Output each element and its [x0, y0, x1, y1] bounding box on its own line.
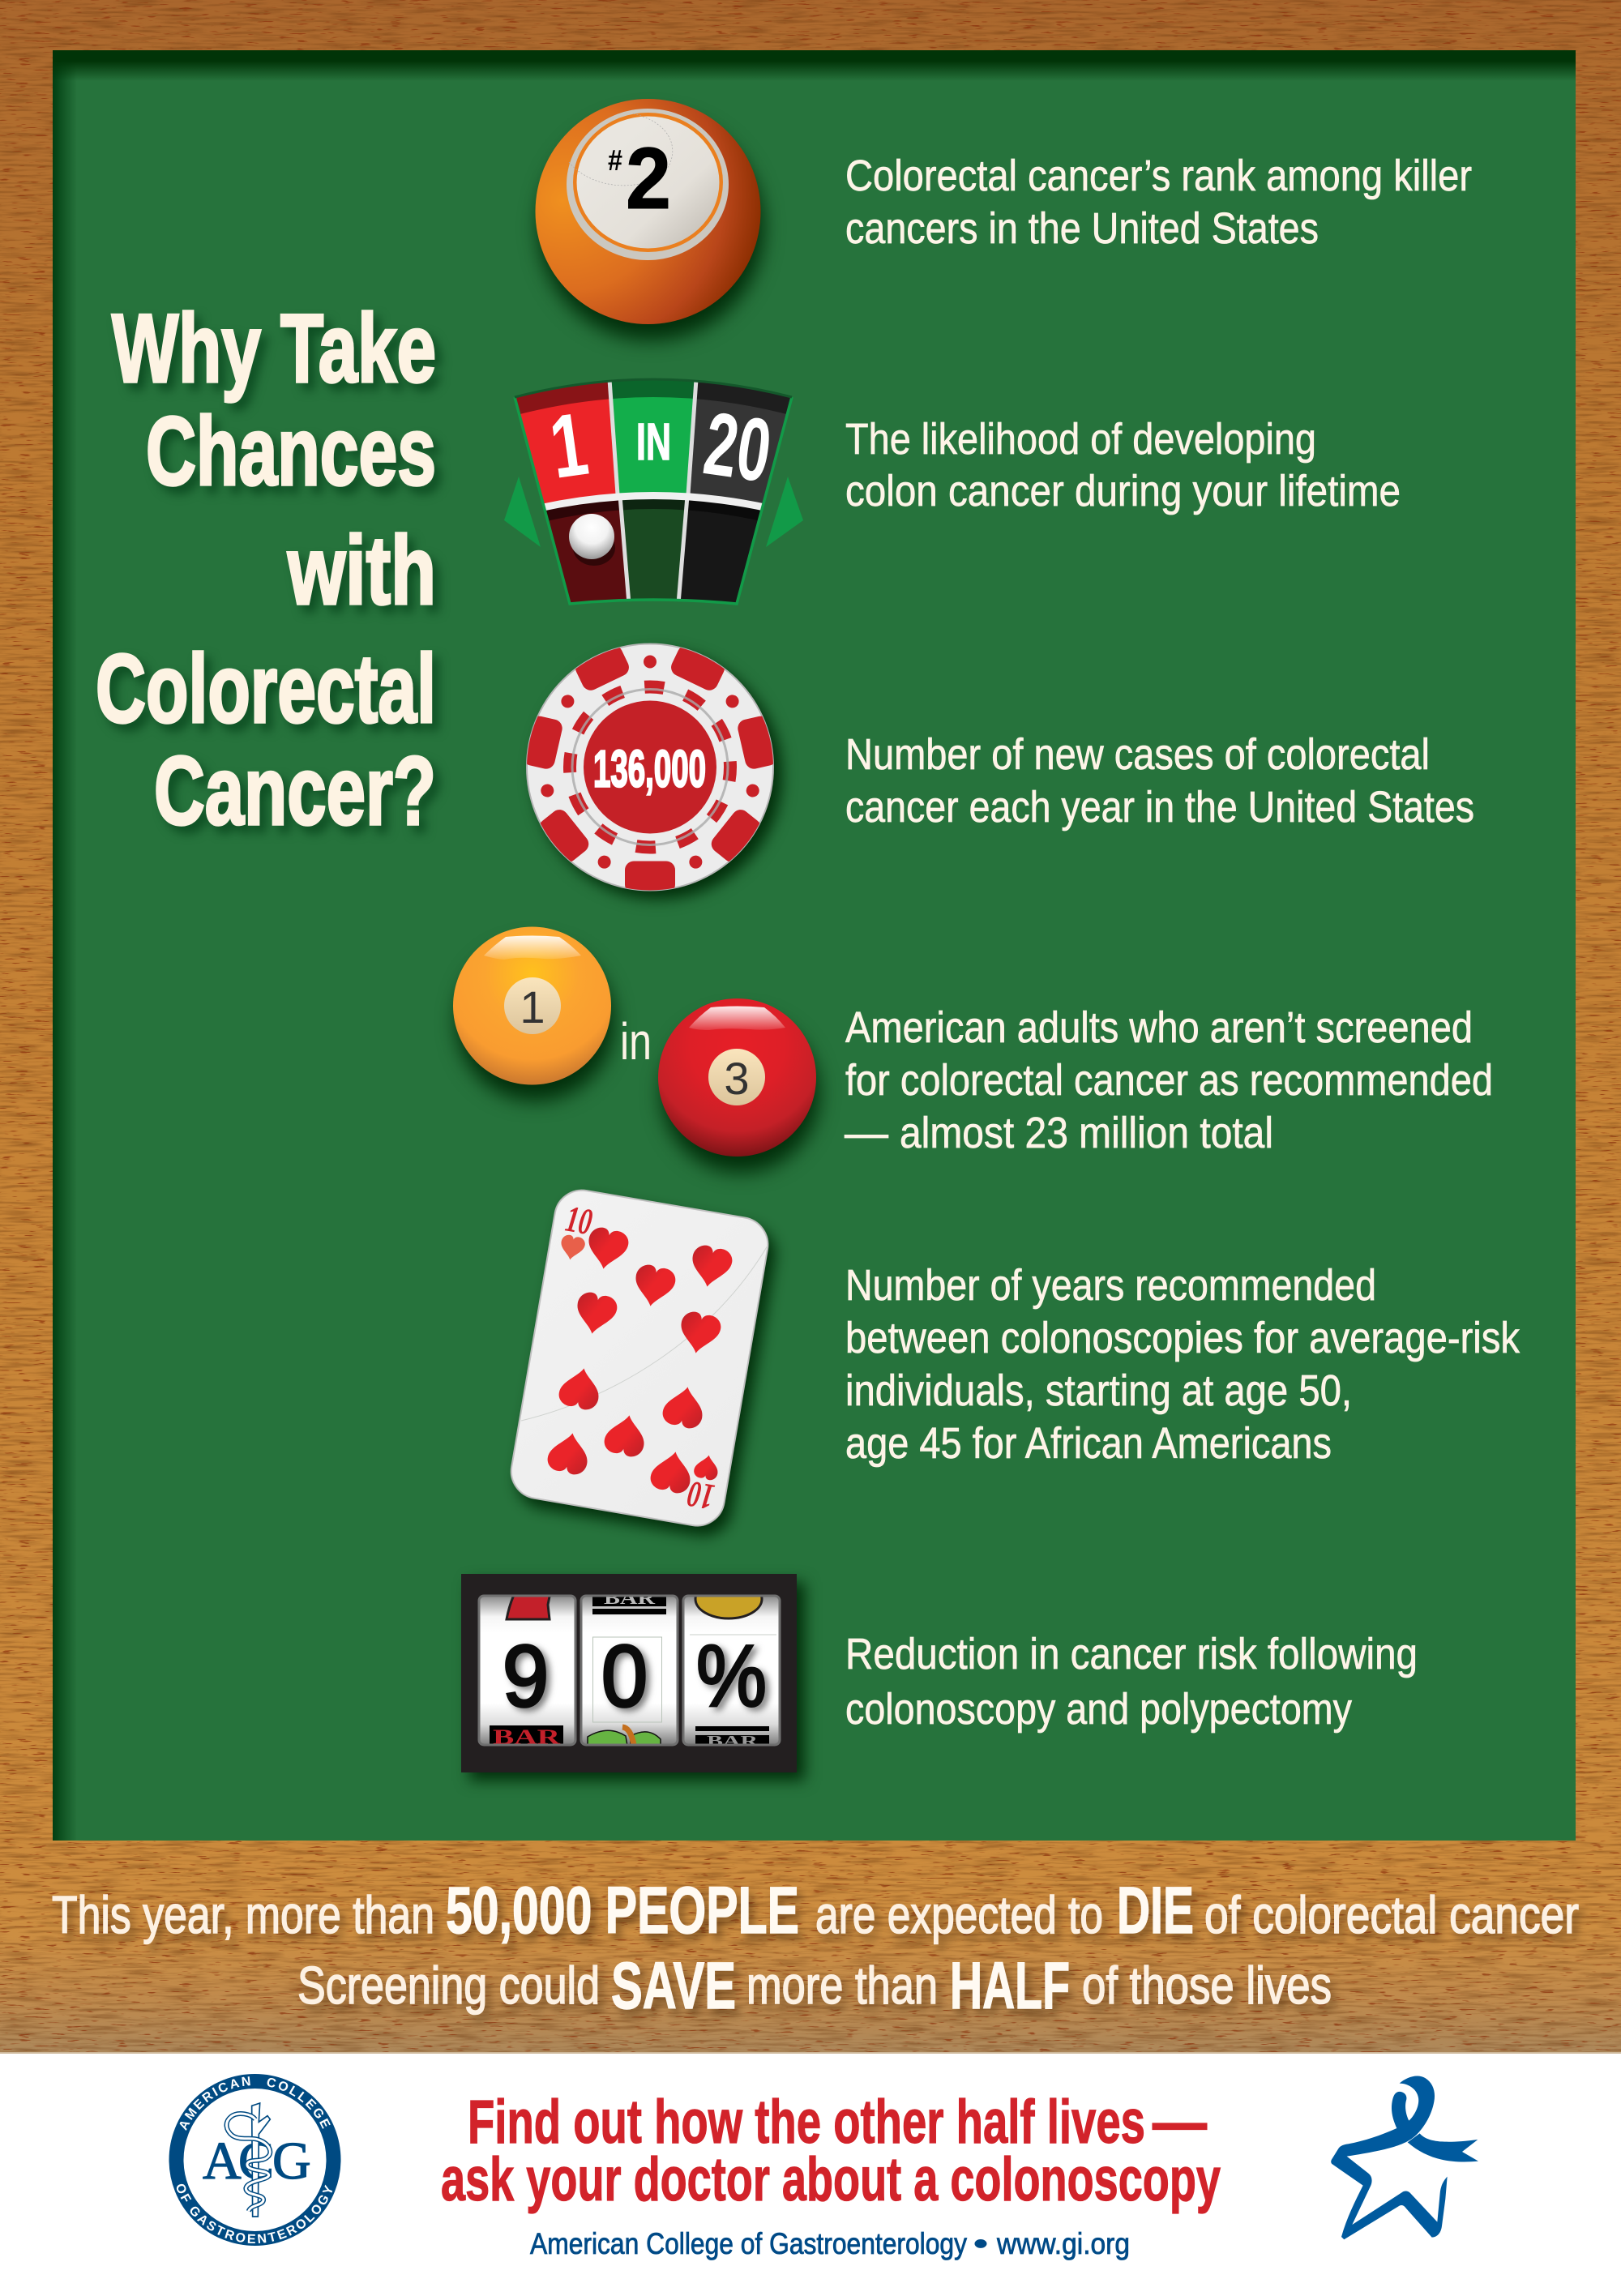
reel 9	[479, 1588, 575, 1750]
text: reduction in cancer risk: colonoscopy and polypectomy	[845, 1685, 1352, 1734]
text: adults not screened: for colorectal cancer as recommended	[845, 1056, 1493, 1105]
reel 9: 9	[503, 1627, 549, 1725]
logo: American College of Gastroenterology: OF GASTROENTEROLOGY	[177, 2183, 332, 2243]
banner text on wood: HALF	[950, 1949, 1070, 2023]
text: new cases each year: Number of new cases of colorectal	[845, 730, 1430, 779]
title: with	[287, 516, 436, 625]
banner text on wood: SAVE	[611, 1949, 736, 2023]
logo: American College of Gastroenterology: A	[203, 2131, 242, 2191]
banner text on wood: 50,000 PEOPLE	[446, 1874, 799, 1948]
logo: American College of Gastroenterology: C	[238, 2131, 274, 2191]
text: years between colonoscopies: individuals, starting at age 50,	[845, 1366, 1352, 1415]
text: lifetime likelihood	[845, 415, 1401, 515]
roulette sectors	[516, 381, 790, 603]
icon: ten of hearts playing card: 10	[685, 1473, 717, 1518]
icon: slot machine 90%	[461, 1574, 797, 1772]
text: rank among killer cancers	[845, 152, 1472, 253]
roulette ball	[569, 514, 615, 566]
reel percent: %	[696, 1627, 767, 1725]
text: rank among killer cancers: Colorectal cancer’s rank among killer	[845, 152, 1472, 200]
logo: ribbon star	[1331, 2076, 1478, 2239]
text: adults not screened: American adults who aren’t screened	[845, 1003, 1473, 1052]
title: Why Take	[112, 294, 436, 403]
title: Chances	[146, 397, 436, 506]
reel 0: 0	[601, 1627, 648, 1725]
logo: American College of Gastroenterology: G	[272, 2131, 311, 2191]
text: years between colonoscopies: age 45 for African Americans	[845, 1419, 1332, 1468]
icon: ten of hearts playing card: 10	[562, 1198, 595, 1242]
text: adults not screened: —	[845, 1109, 888, 1157]
text: adults not screened: almost 23 million total	[900, 1109, 1273, 1157]
title: Cancer?	[154, 737, 436, 845]
icon: pool ball 3	[658, 998, 816, 1157]
call to action: Find out how the other half lives	[468, 2088, 1145, 2157]
text: adults not screened	[845, 1003, 1493, 1157]
icon: poker chip 136,000: 136,000	[593, 739, 706, 797]
organization line: www.gi.org	[996, 2227, 1130, 2260]
icon: pool ball 3: 3	[724, 1053, 750, 1104]
footer panel	[0, 2052, 1621, 2296]
label: in: in	[620, 1012, 652, 1071]
icon: ten of hearts playing card	[507, 1186, 772, 1530]
icon: pool ball 1	[453, 927, 611, 1084]
text: years between colonoscopies: between colonoscopies for average-risk	[845, 1314, 1520, 1362]
reel 9: BAR	[493, 1725, 560, 1749]
text: new cases each year: cancer each year in the United States	[845, 783, 1474, 832]
call to action: —	[1153, 2088, 1207, 2157]
text: reduction in cancer risk: Reduction in cancer risk following	[845, 1630, 1418, 1678]
reel 0: BAR	[604, 1588, 657, 1608]
banner text on wood: of those lives	[1082, 1956, 1332, 2015]
logo: American College of Gastroenterology: AMERICAN COLLEGE	[180, 2076, 331, 2131]
text: lifetime likelihood: colon cancer during your lifetime	[845, 467, 1401, 515]
icon: roulette wheel 1 in 20	[504, 378, 803, 605]
reel 0	[581, 1588, 678, 1751]
icon: roulette wheel 1 in 20: 1	[544, 394, 593, 498]
organization line: American College of Gastroenterology	[530, 2227, 967, 2260]
banner text on wood: more than	[746, 1956, 938, 2015]
text: lifetime likelihood: The likelihood of developing	[845, 415, 1316, 464]
banner text on wood: DIE	[1117, 1874, 1194, 1948]
text: reduction in cancer risk	[845, 1630, 1418, 1734]
icon: roulette wheel 1 in 20: IN	[636, 413, 671, 471]
icon: bingo ball #2: #	[608, 143, 622, 177]
logo: American College of Gastroenterology	[169, 2074, 340, 2246]
reel percent: BAR	[707, 1733, 759, 1749]
title: Colorectal	[96, 635, 436, 743]
call to action	[441, 2088, 1221, 2214]
icon: bingo ball #2: 2	[626, 129, 671, 227]
banner text on wood: This year, more than	[52, 1885, 434, 1944]
banner text on wood: Screening could	[297, 1956, 600, 2015]
organization line: •	[973, 2227, 988, 2260]
call to action: ask your doctor about a colonoscopy	[441, 2145, 1221, 2214]
title	[96, 294, 436, 845]
icon: roulette wheel 1 in 20: 20	[699, 393, 777, 501]
panel: green felt table	[53, 50, 1576, 1841]
roulette arrows	[504, 477, 803, 547]
text: rank among killer cancers: cancers in the United States	[845, 204, 1319, 253]
text: new cases each year	[845, 730, 1474, 832]
icon: bingo ball #2	[535, 99, 760, 324]
icon: poker chip 136,000	[521, 642, 779, 893]
icon: pool ball 1: 1	[520, 981, 545, 1033]
text: years between colonoscopies: Number of years recommended	[845, 1261, 1376, 1310]
reel percent	[683, 1580, 780, 1749]
text: years between colonoscopies	[845, 1261, 1520, 1468]
banner text on wood	[52, 1874, 1579, 2023]
banner text on wood: are expected to	[815, 1885, 1103, 1944]
